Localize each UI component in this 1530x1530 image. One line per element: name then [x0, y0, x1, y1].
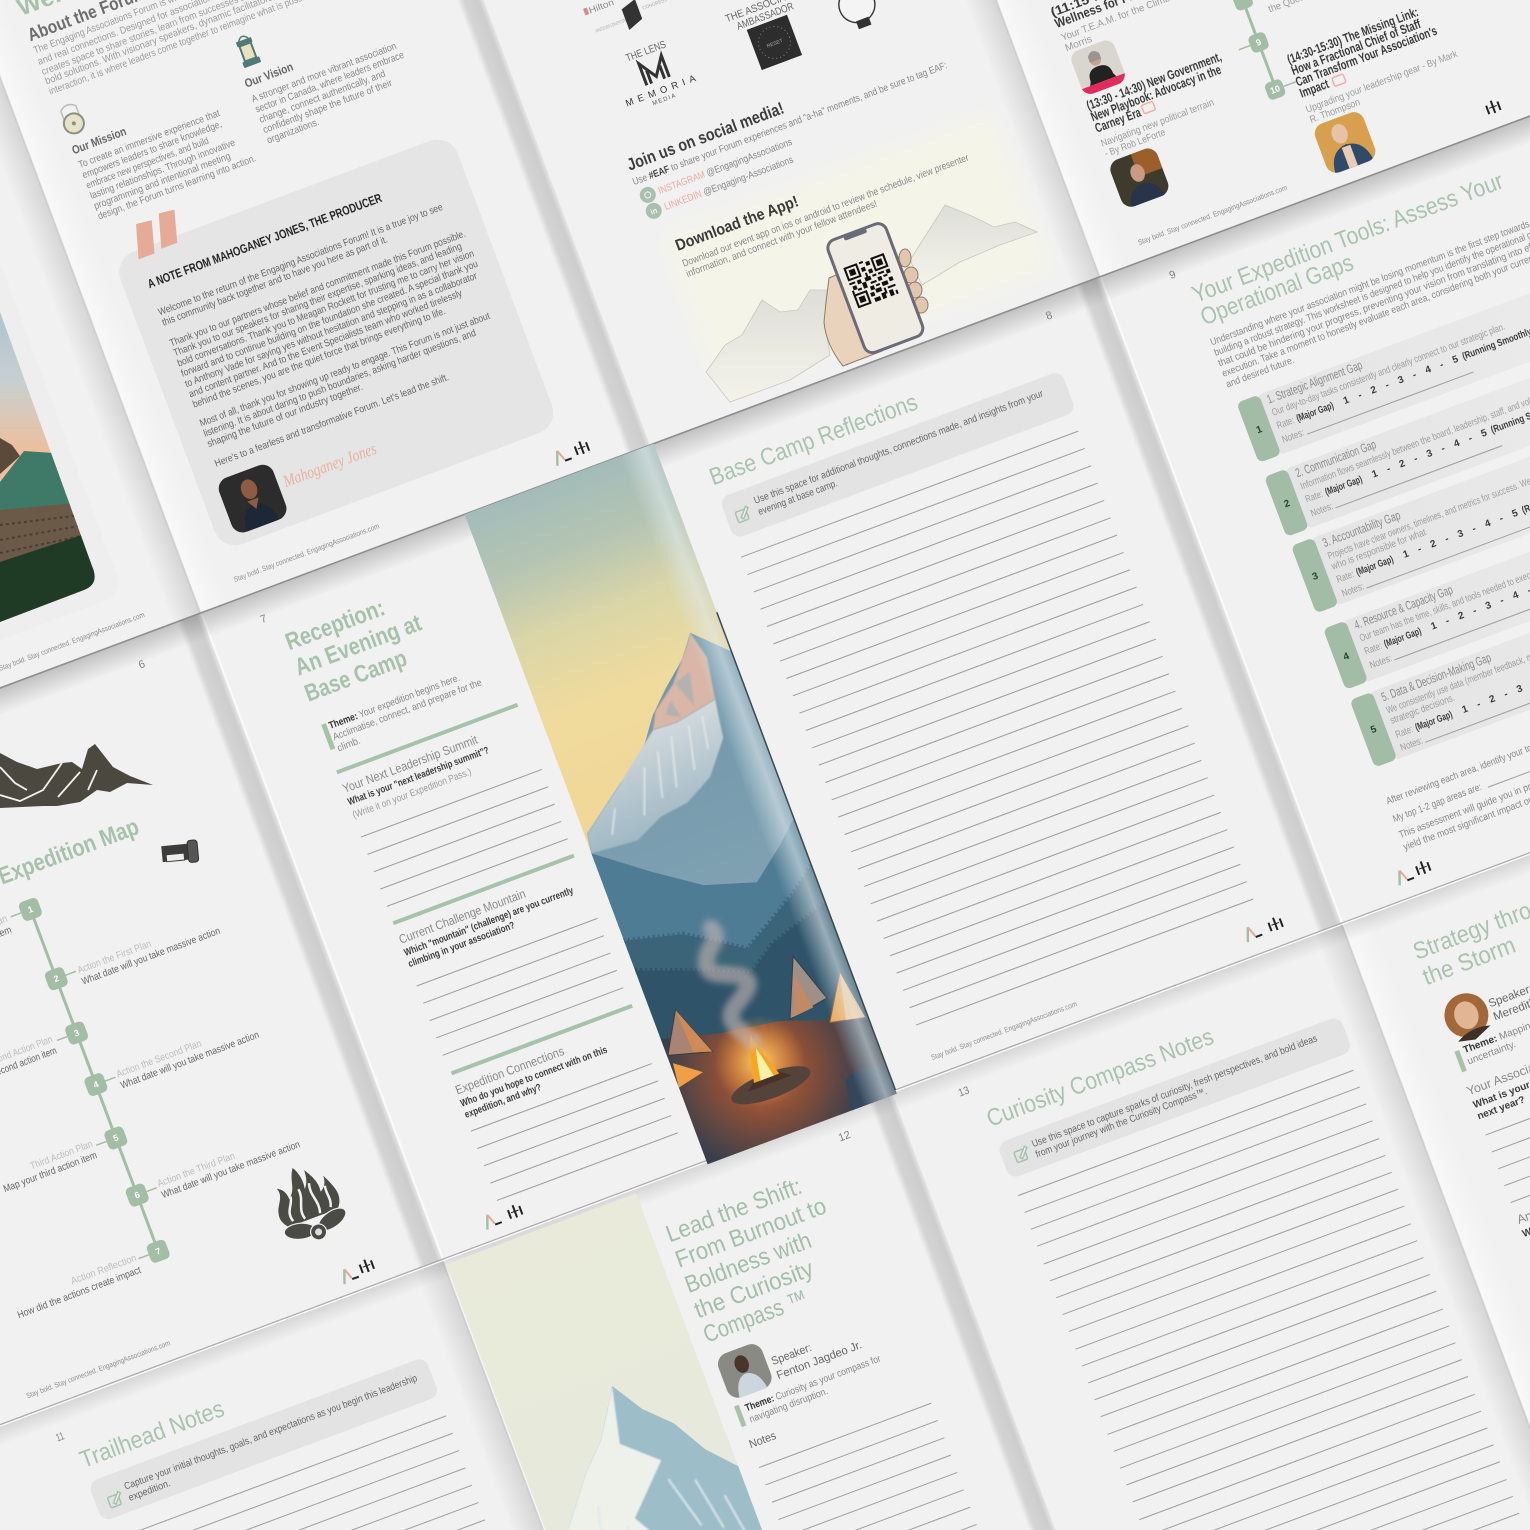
text block: note body: and content partner. And to the Event Specialists team who worked tirelessly [187, 288, 464, 400]
icon: quotation mark [126, 208, 186, 259]
section: current challenge mountain: Which "mountain" (challenge) are you currently [403, 885, 575, 959]
logo: the lens: MEDIA [652, 93, 676, 107]
rock [845, 1068, 897, 1110]
card 2: 1 - 2 - 3 - 4 - 5 [1370, 427, 1489, 481]
session: new government: Carney Era [1093, 104, 1143, 136]
text block: mission [77, 102, 258, 222]
timeline: 9 [1254, 37, 1263, 48]
text block: note body: Thank you to our partners whose belief and commitment made this Forum possible. [168, 229, 467, 349]
panel: expedition map page [0, 657, 376, 1402]
heading: Curiosity Compass Notes [983, 1023, 1217, 1133]
card 1: 1 - 2 - 3 - 4 - 5 [1342, 354, 1460, 407]
timeline [7, 893, 181, 1268]
timeline: 7 [154, 1246, 162, 1257]
text: linkedin: LINKEDIN @Engaging-Associations [663, 155, 795, 213]
card 5: Notes: [1399, 736, 1424, 754]
card 1: 1. Strategic Alignment Gap [1265, 358, 1364, 407]
card 2: Rate: [1304, 489, 1325, 505]
text block: note body: bold conversations. Thank you to Meagan Rockett for trusting me to carry her vision [176, 248, 476, 369]
panel: reception page [258, 540, 688, 1230]
photo: Mahoganey Jones [218, 464, 286, 532]
timeline labels: right: What date will you take massive action [80, 926, 222, 988]
text: instagram: INSTAGRAM @EngagingAssociations [657, 137, 794, 197]
page number: 9 [1168, 269, 1178, 282]
heading: Operational Gaps [1197, 249, 1357, 331]
text block: note body: forward and to continue building on the foundation she created. A special thank you [180, 259, 480, 380]
icon: pencil [734, 506, 752, 523]
heading: Base Camp Reflections [706, 389, 921, 491]
session: new government [1084, 49, 1241, 160]
logo [1484, 98, 1502, 115]
heading: reception: An Evening at [291, 609, 425, 681]
timeline labels: left: Map your third action item [2, 1150, 99, 1195]
theme callout: uncertainty. [1466, 1039, 1518, 1067]
heading: Boldness with [681, 1227, 815, 1299]
section: current challenge mountain [393, 854, 623, 1055]
card 5: strategic decisions. [1389, 693, 1456, 727]
session: wellness: Morris [1064, 34, 1094, 54]
timeline: 5 [112, 1132, 120, 1144]
timeline: 1 [26, 904, 34, 915]
session: missing link: Upgrading your leadership gear - By Mark [1304, 49, 1460, 116]
logo: the lens: MEMORIA [624, 73, 698, 109]
section: next [1515, 1208, 1530, 1240]
section: current challenge mountain: climbing in your association? [407, 920, 517, 970]
panel: strategy through the storm page [1410, 871, 1530, 1241]
timeline: 2 [52, 973, 60, 984]
text block: note body: listening. It is about daring to push boundaries, asking harder questions, and [202, 328, 478, 440]
smoke [695, 923, 768, 1048]
text block: note body: Thank you to our speakers for sharing their expertise, sparking ideas, and leading [172, 241, 463, 359]
section: next leadership summit [336, 703, 568, 906]
card 1 [1236, 264, 1530, 463]
timeline [1216, 0, 1299, 105]
callout: from your journey with the Curiosity Compass™. [1034, 1086, 1209, 1160]
section: expedition connections [449, 1004, 680, 1200]
speaker: Speaker: [770, 1342, 813, 1368]
section: next leadership summit: Your Next Leadership Summit [341, 732, 480, 796]
session: new government: (13:30 - 14:30) New Government, [1084, 49, 1224, 113]
theme callout: Theme: Curiosity as your compass for [744, 1353, 883, 1414]
section: your association [1465, 1017, 1530, 1203]
heading: reception [282, 584, 435, 708]
ruled lines [741, 431, 1253, 1025]
footer: Stay bold. Stay connected. EngagingAssociations.com [25, 1338, 171, 1400]
text block: mission: empowers leaders to share knowledge, [81, 119, 223, 181]
section: next leadership summit: (Write it on your Expedition Pass.) [351, 767, 473, 821]
footer: Stay bold. Stay connected. EngagingAssociations.com [1137, 183, 1289, 247]
section: expedition connections: Expedition Connections [453, 1044, 566, 1097]
text block: note body [157, 197, 513, 470]
icon: flashlight [161, 840, 199, 865]
heading: Lead the Shift: [662, 1173, 806, 1248]
card 3: 1 - 2 - 3 - 4 - 5 [1402, 508, 1520, 561]
illustration: mountain base camp [464, 444, 897, 1165]
card 2: 2 [1283, 498, 1292, 510]
card 3: Rate: [1335, 569, 1356, 586]
text block: mission: design, the Forum turns learning into action. [96, 153, 258, 222]
heading: the Storm [1419, 932, 1519, 991]
panel: hotel page footer: Stay bold. Stay connected. EngagingAssociations.com [0, 610, 146, 673]
heading: Trailhead Notes [76, 1395, 228, 1474]
timeline labels: left: How did the actions create impact [16, 1265, 143, 1321]
heading: Compass ™ [700, 1285, 811, 1348]
timeline: 4 [92, 1079, 100, 1090]
callout: evening at base camp. [757, 478, 839, 518]
icon: campfire [262, 1155, 354, 1251]
intro paragraph: and desired future. [1225, 355, 1296, 390]
page number: 12 [837, 1129, 852, 1144]
photo: Meredith [1438, 987, 1496, 1047]
sponsor logos [583, 0, 673, 43]
timeline: 6 [133, 1190, 141, 1201]
text block: vision: organizations. [265, 117, 321, 146]
text block: vision [250, 39, 418, 146]
illustration: hotel photo [0, 312, 95, 622]
text block: note body: Welcome to the return of the Engaging Associations Forum! It is a true joy to see [157, 202, 445, 318]
card 3: 3 [1311, 571, 1320, 583]
panel: note from the producer [120, 140, 553, 545]
card 2: (Major Gap) [1324, 474, 1364, 498]
session: missing link: R. Thompson [1308, 97, 1362, 126]
heading: social media: Join us on social media! [624, 99, 787, 174]
icon: pencil [1013, 1146, 1031, 1163]
card 1: (Major Gap) [1295, 400, 1335, 424]
heading: our vision: Our Vision [242, 60, 295, 91]
illustration: app mountains [706, 205, 1037, 402]
text block: vision: change, connect authentically, and [258, 69, 387, 126]
section: current challenge mountain: Current Challenge Mountain [397, 887, 528, 947]
callout: Use this space to capture sparks of curiosity, fresh perspectives, and bold ideas [1030, 1033, 1319, 1150]
closing text: My top 1-2 gap areas are: [1391, 782, 1483, 825]
text block: note body: this community back together and to have you here as part of it. [161, 234, 389, 329]
page number: 6 [137, 658, 147, 672]
text block: note body: to Anthony Vade for saying yes without hesitation and stepping in as a collaborator [184, 271, 479, 390]
card 3: Notes: [1340, 581, 1366, 600]
speaker: Fenton Jagdeo Jr. [775, 1339, 864, 1382]
card 2: 2. Communication Gap [1293, 437, 1378, 480]
page number: 13 [957, 1084, 971, 1100]
card 3: (Major Gap) [1355, 554, 1395, 578]
logo: reset square [747, 15, 802, 70]
heading: the Curiosity [691, 1255, 817, 1324]
logos [483, 1203, 524, 1230]
timeline labels: left: Action Reflection [70, 1253, 138, 1287]
logos [552, 439, 591, 466]
logo: reset square: RESET [766, 38, 784, 50]
card 3: who is responsible for what [1329, 527, 1428, 573]
logos [1394, 859, 1432, 885]
theme callout: Acclimatise, connect, and prepare for the [332, 677, 484, 743]
heading: reception: Base Camp [301, 645, 411, 708]
panel: curiosity compass notes page [957, 954, 1530, 1530]
timeline labels: left: Third Action Plan [29, 1139, 94, 1172]
card 5: Rate: [1394, 724, 1415, 741]
qr code [843, 253, 899, 308]
heading: From Burnout to [672, 1193, 830, 1274]
session: new government: - By Rob LeForte [1103, 127, 1167, 160]
campfire [717, 1016, 810, 1104]
heading: our mission: Our Mission [70, 124, 128, 157]
text block: vision: confidently shape the future of their [262, 78, 394, 136]
theme callout [734, 1352, 887, 1429]
theme callout: navigating disruption. [748, 1386, 830, 1425]
card 4: Notes: [1368, 653, 1394, 671]
callout: expedition. [127, 1478, 172, 1504]
section: your association: next year? [1476, 1094, 1527, 1122]
text block: vision: sector in Canada, where leaders embrace [254, 50, 406, 115]
timeline labels: right: What date will you take massive action [119, 1030, 261, 1091]
icon: pencil [107, 1491, 124, 1508]
panel: trailhead notes page [54, 1302, 492, 1530]
illustration: snow peak [446, 1194, 762, 1530]
card 4 [1323, 491, 1530, 690]
text block: note body: shaping the future of our industry together. [206, 382, 364, 450]
theme callout: climb. [336, 736, 362, 754]
card 3 [1291, 408, 1530, 613]
timeline: 3 [73, 1027, 81, 1039]
speaker [1487, 983, 1530, 1023]
card 4: Rate: [1363, 641, 1384, 657]
spine line [717, 612, 895, 1090]
session: missing link: Impact [1297, 76, 1331, 101]
callout: Use this space for additional thoughts, connections made, and insights from your [752, 388, 1045, 507]
card 5 [1350, 562, 1530, 768]
photo: Mark Thompson illustration [1314, 112, 1376, 173]
photo: Rob LeForte [1110, 148, 1168, 207]
photo: speaker [1071, 40, 1125, 94]
card 4: (Major Gap) [1383, 626, 1423, 650]
session: new government: New Playbook: Advocacy in the [1089, 62, 1223, 124]
text: download body: information, and connect with your fellow attendees! [685, 199, 879, 280]
illustration: hand holding phone with QR code [824, 221, 928, 366]
icon: linkedin [643, 201, 664, 221]
text block: vision: A stronger and more vibrant association [250, 41, 398, 105]
icon: linkedin: in [649, 206, 659, 217]
card 1: 1 [1255, 424, 1264, 436]
ruled lines [1018, 1070, 1525, 1530]
text block: note body: behind the scenes, you are the quiet force that brings everything to life. [191, 306, 447, 411]
session: missing link [1285, 0, 1464, 126]
section: expedition connections: expedition, and why? [463, 1082, 543, 1121]
session: missing link: Can Transform Your Association's [1293, 23, 1439, 89]
card 4: 4 [1342, 651, 1351, 663]
ruled lines [759, 1403, 977, 1530]
logo: the lens [609, 33, 700, 116]
panel: expedition tools page [1168, 126, 1530, 886]
ruled lines [112, 1416, 491, 1530]
panel: join us page [570, 0, 1049, 395]
text block: note body: Here's to a fearless and transformative Forum. Let's lead the shift. [213, 372, 450, 470]
card 2 [1264, 338, 1530, 537]
session: missing link: How a Fractional Chief of Staff [1289, 16, 1423, 78]
page number: 8 [1044, 309, 1054, 323]
logos [1243, 915, 1284, 942]
card 1: Rate: [1275, 415, 1296, 432]
illustration: mountain silhouette [0, 744, 153, 808]
text block: mission: To create an immersive experience that [77, 108, 222, 171]
timeline labels: right [76, 914, 302, 1201]
timeline labels: right: Action the Third Plan [156, 1151, 237, 1190]
page number: 11 [54, 1430, 66, 1444]
logo: the lens: THE LENS [624, 39, 668, 64]
session: new government: Navigating new political terrain [1099, 97, 1216, 150]
sponsor logos: VANCOUVER CONVENTION [595, 18, 627, 35]
text block: mission: lasting relationships. Through innovative [89, 137, 237, 202]
icon: instagram [637, 185, 658, 205]
section: expedition connections: Who do you hope to connect with on this [459, 1045, 609, 1110]
section: next leadership summit: What is your "next leadership summit"? [346, 745, 491, 808]
footer: Stay bold. Stay connected. EngagingAssociations.com [232, 521, 381, 584]
timeline: 10 [1269, 83, 1282, 96]
notes label: Notes [748, 1430, 778, 1451]
text block: mission: programming and intentional meeting [93, 151, 232, 212]
signature: Mahoganey Jones [280, 439, 379, 491]
icon: light bulb [834, 0, 882, 33]
theme callout: Theme: Your expedition begins here. [327, 673, 461, 732]
logos [339, 1257, 376, 1284]
footer: Stay bold. Stay connected. EngagingAssociations.com [930, 999, 1078, 1062]
page number: 7 [259, 613, 269, 626]
panel: app background [663, 115, 1049, 392]
timeline labels: left [0, 913, 143, 1321]
icon: compass [58, 102, 87, 136]
panel: schedule page [1048, 0, 1503, 249]
text: download body: Download our event app on ios or android to review the schedule, view presenter [681, 152, 971, 270]
icon: lantern [234, 33, 261, 68]
callout [88, 1357, 440, 1522]
timeline labels: right: Action the Second Plan [115, 1038, 203, 1080]
text: hashtag: Use #EAF to share your Forum experiences and "a-ha" moments, and be sure to tag EAF: [631, 60, 949, 188]
text block: note body: Most of all, thank you for showing up ready to engage. This Forum is not just about [198, 311, 492, 429]
timeline labels: right: Action the First Plan [76, 939, 153, 976]
text block: mission: embrace new perspectives, and build [85, 136, 210, 192]
photo: Fenton Jagdeo Jr. [718, 1344, 772, 1398]
timeline labels: right: What date will you take massive action [160, 1139, 302, 1201]
card 1: Notes: [1281, 427, 1306, 446]
panel: lead the shift page [446, 1131, 977, 1530]
panel: about the forum page [14, 0, 591, 587]
card 5: 5 [1369, 724, 1379, 736]
heading: note title: A NOTE FROM MAHOGANEY JONES, THE PRODUCER [146, 191, 384, 291]
card 4: 4. Resource & Capacity Gap [1352, 583, 1455, 632]
callout: Capture your initial thoughts, goals, and expectations as you begin this leadership [123, 1373, 419, 1493]
heading: reception: Reception: [282, 594, 389, 656]
card 3: 3. Accountability Gap [1321, 508, 1402, 550]
card 2: Notes: [1309, 501, 1335, 520]
tents [668, 955, 866, 1088]
panel: base camp reflections page [697, 308, 1285, 1063]
heading [662, 1167, 858, 1348]
heading: download: Download the App! [673, 193, 801, 255]
card 5: (Major Gap) [1414, 709, 1454, 733]
